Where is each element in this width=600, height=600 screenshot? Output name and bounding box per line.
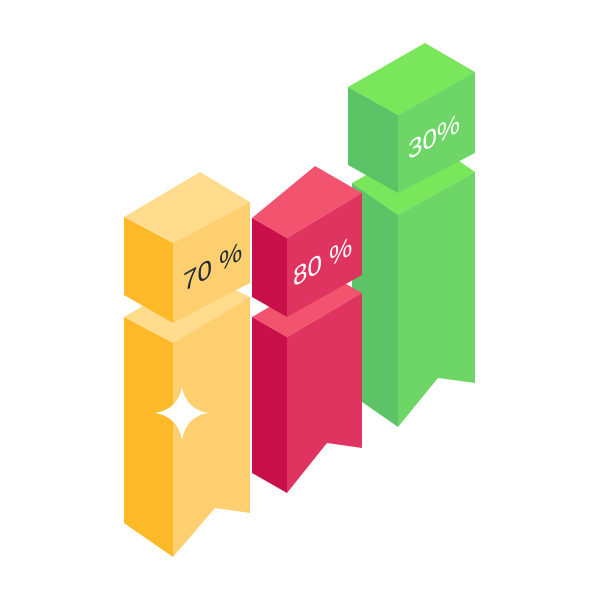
red ribbon <box>252 273 362 493</box>
bar: green 30% <box>348 43 475 427</box>
label: 30%: 30% <box>408 108 460 166</box>
label: 80 %: 80 % <box>293 231 352 293</box>
yellow ribbon <box>124 273 250 557</box>
bar: red 80% <box>252 166 362 493</box>
green cube <box>348 43 475 193</box>
icon: sparkle <box>155 387 208 440</box>
red cube <box>252 166 362 317</box>
bar: yellow 70% <box>124 172 250 557</box>
label: 70 %: 70 % <box>183 236 242 298</box>
green ribbon <box>352 140 475 427</box>
yellow cube <box>124 172 250 323</box>
